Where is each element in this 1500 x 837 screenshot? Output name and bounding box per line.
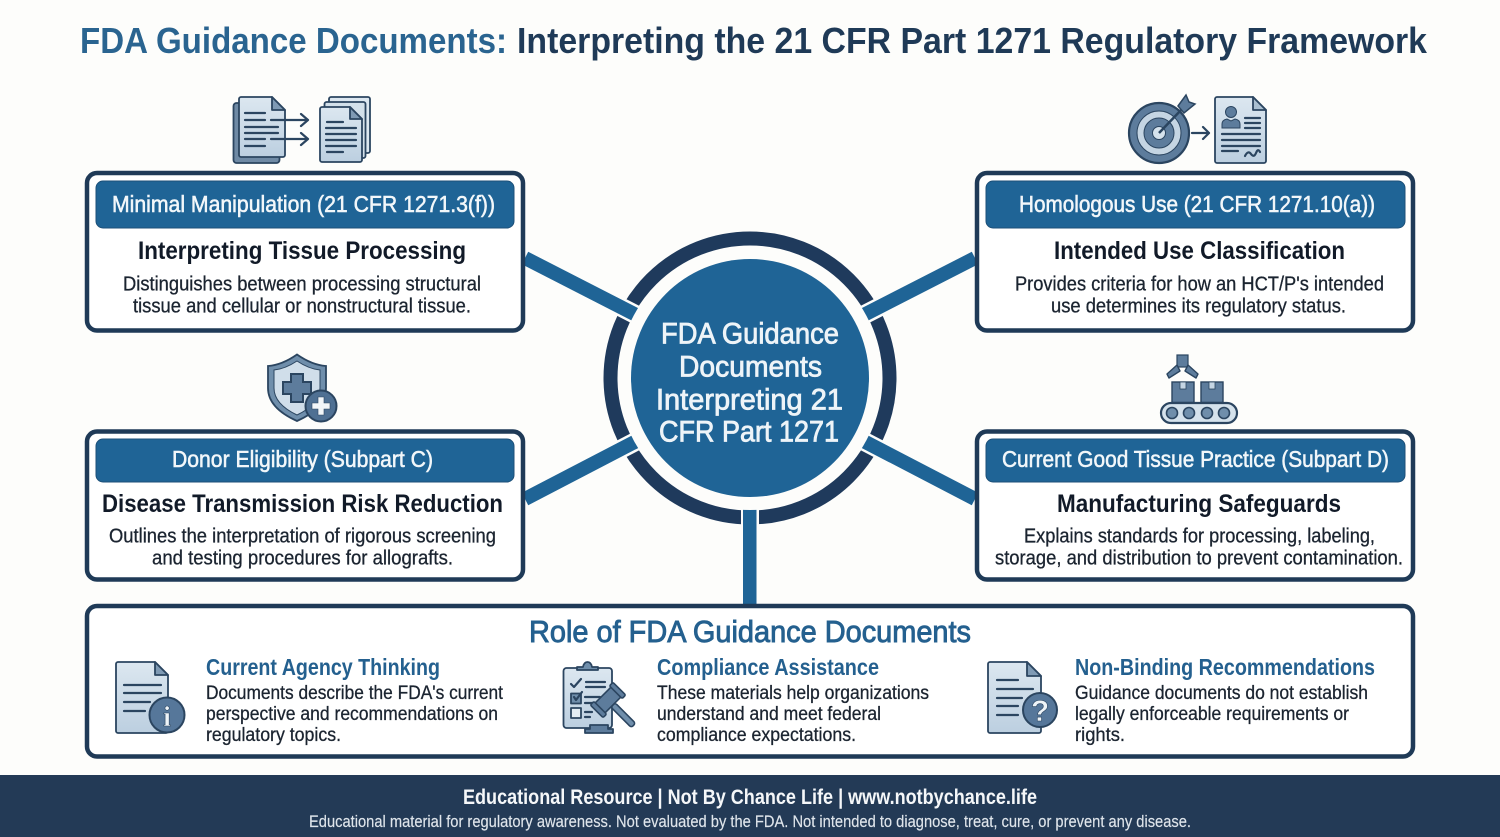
panel: minimal manipulation bbox=[87, 173, 523, 330]
title bbox=[80, 20, 1428, 61]
card description: Provides criteria for how an HCT/P's intended bbox=[1015, 274, 1384, 296]
central hub with connectors bbox=[525, 238, 975, 605]
block: non-binding recommendations: Non-Binding Recommendations bbox=[1075, 654, 1375, 680]
panel: donor eligibility bbox=[87, 432, 523, 580]
header bar bbox=[986, 181, 1405, 228]
footer: Educational Resource | Not By Chance Life | www.notbychance.life bbox=[463, 786, 1037, 809]
header bar bbox=[96, 181, 514, 228]
card description: storage, and distribution to prevent contamination. bbox=[995, 548, 1403, 570]
block: compliance assistance: understand and meet federal bbox=[657, 703, 881, 725]
block: current agency thinking: perspective and recommendations on bbox=[206, 703, 498, 725]
connector: bottom right bbox=[850, 434, 975, 499]
connector: bottom bbox=[743, 490, 756, 605]
block: current agency thinking bbox=[206, 654, 504, 746]
icon: document with question badge: ? bbox=[1031, 695, 1049, 728]
card heading: Disease Transmission Risk Reduction bbox=[102, 490, 503, 518]
block: non-binding recommendations: Guidance documents do not establish bbox=[1075, 682, 1368, 704]
hub text: FDA Guidance bbox=[661, 318, 839, 350]
card heading: Manufacturing Safeguards bbox=[1057, 490, 1341, 518]
icon: document with info badge bbox=[116, 662, 184, 733]
block: current agency thinking: regulatory topics. bbox=[206, 724, 341, 746]
block: compliance assistance: compliance expectations. bbox=[657, 724, 856, 746]
panel: homologous use: Homologous Use (21 CFR 1271.10(a)) bbox=[1019, 191, 1375, 217]
block: non-binding recommendations: rights. bbox=[1075, 724, 1125, 746]
icon: target and profile document bbox=[1129, 95, 1266, 163]
block: current agency thinking: Documents describe the FDA's current bbox=[206, 682, 504, 704]
icon: document with info badge: i bbox=[163, 701, 171, 733]
card description: and testing procedures for allografts. bbox=[152, 548, 453, 570]
panel: minimal manipulation: Minimal Manipulation (21 CFR 1271.3(f)) bbox=[112, 191, 495, 217]
card description: tissue and cellular or nonstructural tissue. bbox=[133, 296, 471, 318]
icon: documents transfer bbox=[234, 97, 370, 163]
hub text bbox=[656, 318, 843, 448]
icon: conveyor belt bbox=[1161, 355, 1237, 423]
hub text: Interpreting 21 bbox=[656, 384, 843, 416]
panel: current good tissue practice bbox=[977, 432, 1413, 580]
panel: role of FDA guidance documents bbox=[87, 606, 1413, 756]
icon: document with question badge bbox=[988, 662, 1057, 733]
footer bbox=[0, 775, 1500, 837]
block: non-binding recommendations: legally enforceable requirements or bbox=[1075, 703, 1349, 725]
block: compliance assistance: Compliance Assistance bbox=[657, 654, 879, 680]
hub text: CFR Part 1271 bbox=[659, 416, 839, 448]
header bar bbox=[96, 439, 514, 482]
block: compliance assistance bbox=[657, 654, 929, 746]
card description: use determines its regulatory status. bbox=[1051, 296, 1346, 318]
panel: donor eligibility: Donor Eligibility (Subpart C) bbox=[172, 446, 433, 472]
card heading: Intended Use Classification bbox=[1054, 237, 1345, 265]
title: FDA Guidance Documents: bbox=[80, 20, 507, 61]
connector: top right bbox=[850, 258, 975, 322]
panel: current good tissue practice: Current Good Tissue Practice (Subpart D) bbox=[1002, 446, 1389, 472]
card description bbox=[109, 526, 496, 570]
card description bbox=[123, 274, 481, 318]
title: Interpreting the 21 CFR Part 1271 Regulatory Framework bbox=[517, 20, 1428, 61]
hub text: Documents bbox=[679, 350, 822, 384]
block: non-binding recommendations bbox=[1075, 654, 1375, 746]
card description: Explains standards for processing, labeling, bbox=[1024, 526, 1375, 548]
card heading: Interpreting Tissue Processing bbox=[138, 237, 466, 265]
icon: shield with plus bbox=[268, 354, 336, 422]
icon: checklist and gavel bbox=[564, 662, 645, 737]
connector: top left bbox=[525, 258, 650, 322]
card description: Outlines the interpretation of rigorous screening bbox=[109, 526, 496, 548]
panel heading: Role of FDA Guidance Documents bbox=[529, 614, 971, 649]
card description: Distinguishes between processing structural bbox=[123, 274, 481, 296]
block: current agency thinking: Current Agency Thinking bbox=[206, 654, 440, 680]
card description bbox=[995, 526, 1403, 570]
header bar bbox=[986, 439, 1405, 482]
panel: homologous use bbox=[977, 173, 1413, 330]
footer: Educational material for regulatory awareness. Not evaluated by the FDA. Not intended to diagnose, treat, cure, or prevent any disease. bbox=[309, 813, 1191, 831]
block: compliance assistance: These materials help organizations bbox=[657, 682, 929, 704]
card description bbox=[1015, 274, 1384, 318]
connector: bottom left bbox=[525, 434, 650, 499]
